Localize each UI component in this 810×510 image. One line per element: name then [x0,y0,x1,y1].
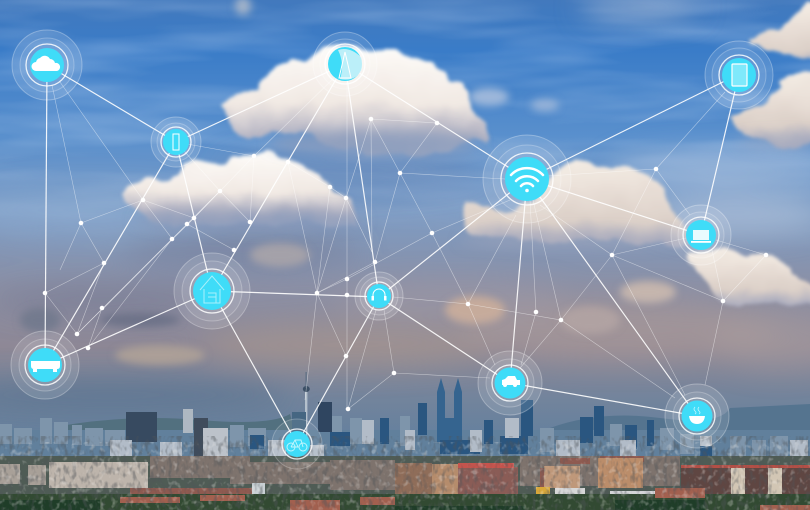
thin secondary network lines [45,70,766,409]
pale mid towers [110,418,808,475]
node: bicycle icon [272,419,322,469]
node: top centre icon over cloud [313,32,377,96]
node: cloud icon [12,30,82,100]
node: headphones icon [355,272,403,320]
node: wifi icon [483,135,571,223]
soft shadows beneath clouds [135,130,810,247]
distant city band [0,430,810,466]
node: phone icon [151,117,201,167]
fine light detail over city [0,442,810,510]
orange and cream apartments [544,458,643,488]
main network lines [45,64,739,444]
clouds, top right corner [730,4,810,146]
foreground trees and rooftops [0,494,810,510]
node: bus icon [11,331,79,399]
small faint clouds [20,0,676,365]
node: laptop icon [671,205,731,265]
brown apartment blocks, centre [395,463,518,508]
distant mountains [60,404,810,450]
node: car icon [478,351,542,415]
cloud, centre left [124,154,358,226]
cloud, right middle [686,251,810,304]
cloud, centre right [464,160,696,246]
small coloured buildings [536,487,655,501]
large cloud, top centre [224,48,488,156]
brown apartment blocks, right [681,465,810,498]
hazy building blocks [0,416,788,460]
blue glass towers [250,400,712,459]
tall pale towers [183,409,193,433]
mid-distance district [0,456,810,510]
wispy streaks in sky [0,0,810,209]
dark office tower block [126,412,157,442]
node: coffee cup icon [665,384,729,448]
city skyline [0,372,810,510]
pale apartments, left [0,462,148,488]
node: tablet icon [705,41,773,109]
fine dark detail over city [0,436,810,510]
network junction dots [43,117,768,411]
Petronas towers [437,378,462,442]
water tower [252,483,265,506]
node: house icon [174,253,250,329]
KL tower [303,372,310,442]
